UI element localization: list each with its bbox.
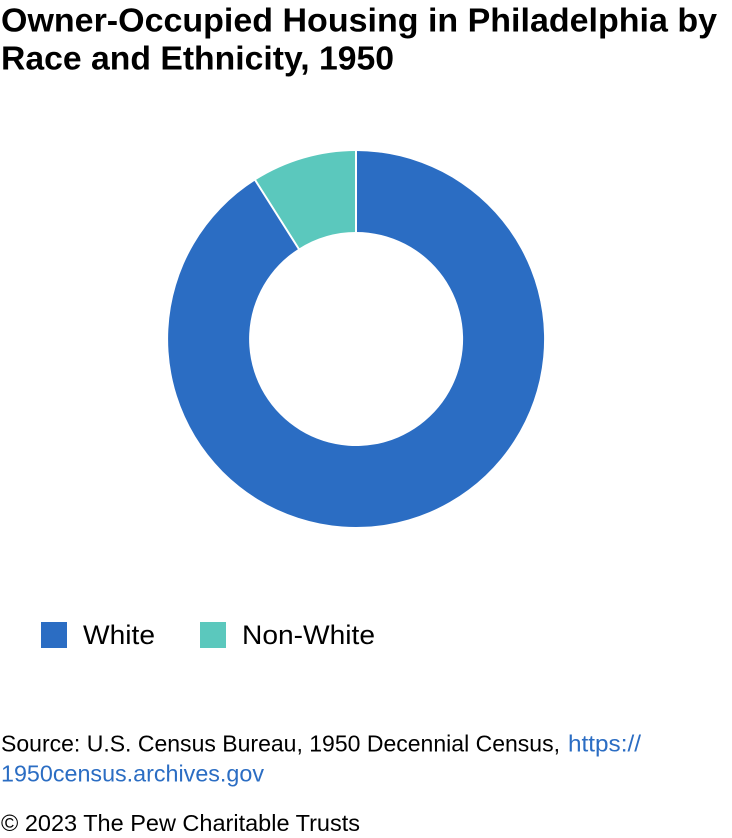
segment: Non-White bbox=[255, 151, 356, 249]
title: Race and Ethnicity, 1950 bbox=[1, 40, 394, 76]
copyright: © 2023 The Pew Charitable Trusts bbox=[1, 810, 360, 836]
source note bbox=[1, 731, 641, 787]
donut chart bbox=[168, 149, 544, 527]
title bbox=[1, 2, 718, 76]
source note: https:// bbox=[568, 731, 641, 757]
source note: Source: U.S. Census Bureau, 1950 Decennial Census, bbox=[1, 731, 560, 757]
source note: 1950census.archives.gov bbox=[1, 761, 264, 787]
legend label: White: White bbox=[83, 620, 155, 650]
legend swatch: Non-White bbox=[200, 622, 226, 648]
legend swatch: White bbox=[41, 622, 67, 648]
legend bbox=[41, 620, 375, 650]
segment separators bbox=[254, 149, 356, 250]
title: Owner-Occupied Housing in Philadelphia by bbox=[1, 2, 718, 38]
segment: White bbox=[168, 151, 544, 527]
legend label: Non-White: Non-White bbox=[242, 620, 375, 650]
